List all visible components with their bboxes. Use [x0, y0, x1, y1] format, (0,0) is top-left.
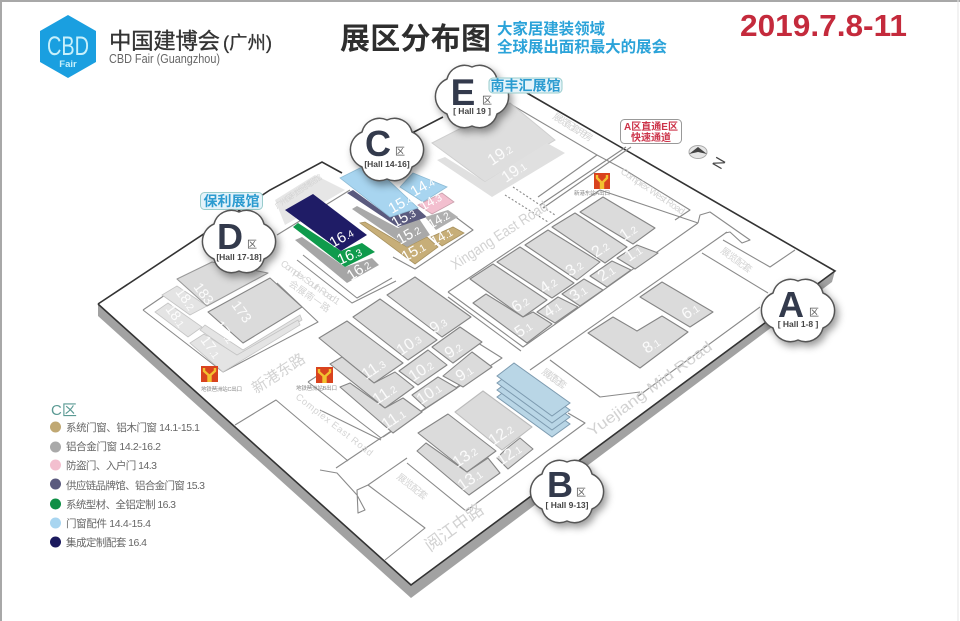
hall 15.1: 15.1 [398, 238, 429, 265]
hall 15.4: 15.4 [386, 190, 416, 217]
halls: zone B: 13.2 [450, 442, 481, 471]
cloud badge: D: [Hall 17-18] [216, 252, 262, 262]
hall 14.1 [428, 224, 464, 249]
legend item 3: 防盗门、入户门 14.3 [66, 459, 157, 472]
halls: zone D: 18.1 [163, 301, 190, 330]
metro icon: centre: 地铁琶洲站B出口 [296, 384, 337, 392]
metro icon: north: 新港东站A出口 [574, 189, 610, 197]
subtitle: 大家居建装领域 [497, 19, 605, 38]
brand name: 中国建博会 [109, 29, 220, 54]
logo: CBD Fair hexagon: Fair [59, 59, 77, 70]
halls: zone D: 183 [191, 279, 217, 308]
halls: zone B: 9.3 [427, 313, 451, 337]
hall 16.2: 16.2 [344, 256, 374, 284]
cloud badge: C: [Hall 14-16] [364, 159, 410, 169]
halls: zone B: 11.3 [359, 355, 389, 383]
road names: Yuejiang Mid Road [584, 338, 716, 440]
cloud badge: D [202, 210, 276, 273]
callout: fast lane A to E: A区直通E区 [624, 120, 678, 133]
legend: zone C: C区 [51, 402, 77, 419]
hall 15.1 [360, 222, 438, 265]
cloud badge: C [350, 118, 424, 181]
cloud badge: E: [ Hall 19 ] [453, 106, 491, 116]
cloud badge: B: [ Hall 9-13] [546, 500, 589, 510]
brand name: (广州) [223, 33, 272, 53]
halls: zone C [285, 163, 464, 284]
blue stacked hall [497, 363, 570, 437]
halls: zone A: 3.1 [567, 281, 591, 305]
halls: zone A [470, 197, 713, 368]
title: 展区分布图 [340, 23, 491, 56]
halls: zone A: 4.1 [541, 297, 565, 321]
hall 16.2 [295, 237, 379, 284]
road names: 展览配套 [539, 366, 569, 392]
metro icon: west: 地铁琶洲站C出口 [201, 385, 242, 393]
cloud badge: E: E [451, 72, 475, 113]
halls: zone B: 11.1 [379, 405, 409, 433]
halls: zone B [319, 277, 533, 495]
road names: Complex East Road [293, 392, 375, 459]
road names: Xingang East Road [448, 198, 551, 273]
hall 16.4: 16.4 [326, 224, 357, 251]
road names: 展览配套 [718, 245, 755, 276]
halls: zone E: 19.2 [485, 140, 516, 169]
legend item 6: 门窗配件 14.4-15.4 [66, 517, 151, 530]
cloud badge: D: D [217, 216, 243, 257]
road names: Complex West Road [618, 166, 687, 217]
legend item 5: 系统型材、全铝定制 16.3 [66, 498, 176, 511]
halls: zone E: 19.1 [499, 157, 530, 186]
date: 2019.7.8-11 [740, 8, 907, 43]
halls: zone A: 2.1 [595, 261, 619, 285]
road and block outlines [143, 105, 795, 560]
halls: zone A: 3.2 [563, 256, 587, 280]
hall 15.3 [347, 190, 427, 231]
legend: zone C [50, 402, 205, 549]
halls: zone A: 1.2 [617, 220, 641, 244]
brand name [109, 29, 272, 66]
road names [249, 110, 755, 555]
halls: zone B: 10.1 [414, 379, 445, 408]
hall 15.3: 15.3 [388, 204, 419, 231]
cloud badge: C: 区 [395, 146, 405, 158]
halls: zone A: 1.1 [622, 241, 646, 265]
cloud badge: B [530, 460, 604, 523]
halls: zone B: 12.1 [494, 440, 525, 469]
cloud badge: D: 区 [247, 239, 257, 251]
halls: zone D [155, 262, 302, 372]
brand name: CBD Fair (Guangzhou) [109, 52, 220, 66]
halls: zone B: 10.3 [394, 330, 425, 359]
halls: zone B: 9.1 [453, 361, 477, 385]
halls: zone D: 17.2 [212, 317, 239, 346]
hall 16.3 [293, 223, 375, 269]
venue tag: Nanfeng: 南丰汇展馆 [490, 78, 560, 94]
subtitle: 全球展出面积最大的展会 [497, 37, 667, 56]
road names: Complex South Road 1 [278, 258, 342, 308]
subtitle [497, 19, 667, 56]
hall 15.4 [340, 163, 418, 217]
cloud badge: B: B [547, 464, 573, 505]
metro icon: north [574, 173, 610, 197]
legend item 2: 铝合金门窗 14.2-16.2 [66, 440, 161, 453]
hall 16.4 [285, 194, 367, 251]
callout: fast lane A to E: 快速通道 [631, 131, 671, 144]
metro icon: west [201, 366, 242, 393]
halls: zone A: 8.1 [640, 333, 664, 357]
compass: N [709, 154, 730, 172]
halls: zone A: 6.2 [509, 292, 533, 316]
halls: zone A: 5.1 [512, 317, 536, 341]
venue tag: Poly: 保利展馆 [204, 193, 260, 209]
halls: zone B: 11.2 [370, 380, 400, 408]
halls: zone B: 13.1 [455, 465, 486, 494]
hall 14.3 [417, 189, 454, 214]
cloud badge: E [435, 65, 509, 128]
cloud badge: A: A [778, 284, 804, 325]
halls: zone B: 10.2 [406, 356, 437, 385]
cloud badge: C: C [365, 123, 391, 164]
hall 14.2: 14.2 [425, 207, 453, 232]
logo: CBD Fair hexagon [40, 15, 96, 78]
road names: 阅江中路 [421, 500, 487, 555]
halls: zone D: 173 [229, 297, 255, 326]
compass [689, 146, 730, 172]
hall 15.2 [352, 206, 430, 248]
road names: 新港东路 [249, 350, 308, 397]
halls: zone A: 4.2 [537, 273, 561, 297]
road names: 会展南一路 [286, 278, 333, 315]
logo: CBD Fair hexagon: CBD [47, 31, 89, 61]
road names: 广州保利世贸博览馆 [273, 171, 324, 211]
road names: 展览配套 [394, 471, 430, 503]
hall 14.4: 14.4 [408, 173, 438, 200]
cloud badge: A [761, 279, 835, 342]
hall 14.4 [400, 173, 447, 202]
cloud badge: A: [ Hall 1-8 ] [778, 319, 818, 329]
hall 14.3: 14.3 [417, 189, 445, 214]
callout: fast lane A to E [620, 120, 682, 144]
road names: 展览配套用房 [550, 110, 595, 144]
cloud badge: E: 区 [482, 95, 492, 107]
halls: zone A: 6.1 [679, 299, 703, 323]
halls: zone D: 18.2 [173, 284, 200, 313]
map base with shadow [98, 93, 835, 598]
hall 15.2: 15.2 [394, 221, 424, 248]
halls: zone A: 2.2 [589, 237, 613, 261]
halls: zone B: 12.2 [486, 420, 517, 449]
legend item 7: 集成定制配套 16.4 [66, 536, 147, 549]
cloud badge: A: 区 [809, 307, 819, 319]
hall 14.1: 14.1 [428, 224, 456, 249]
hall 16.3: 16.3 [335, 243, 365, 269]
legend item 4: 供应链品牌馆、铝合金门窗 15.3 [66, 479, 205, 492]
legend item 1: 系统门窗、铝木门窗 14.1-15.1 [66, 421, 200, 434]
halls: zone D: 17.1 [198, 332, 225, 361]
cloud badge: B: 区 [576, 487, 586, 499]
halls: zone B: 9.2 [442, 338, 466, 362]
metro icon: centre [296, 367, 337, 392]
halls: zone E [432, 103, 565, 197]
